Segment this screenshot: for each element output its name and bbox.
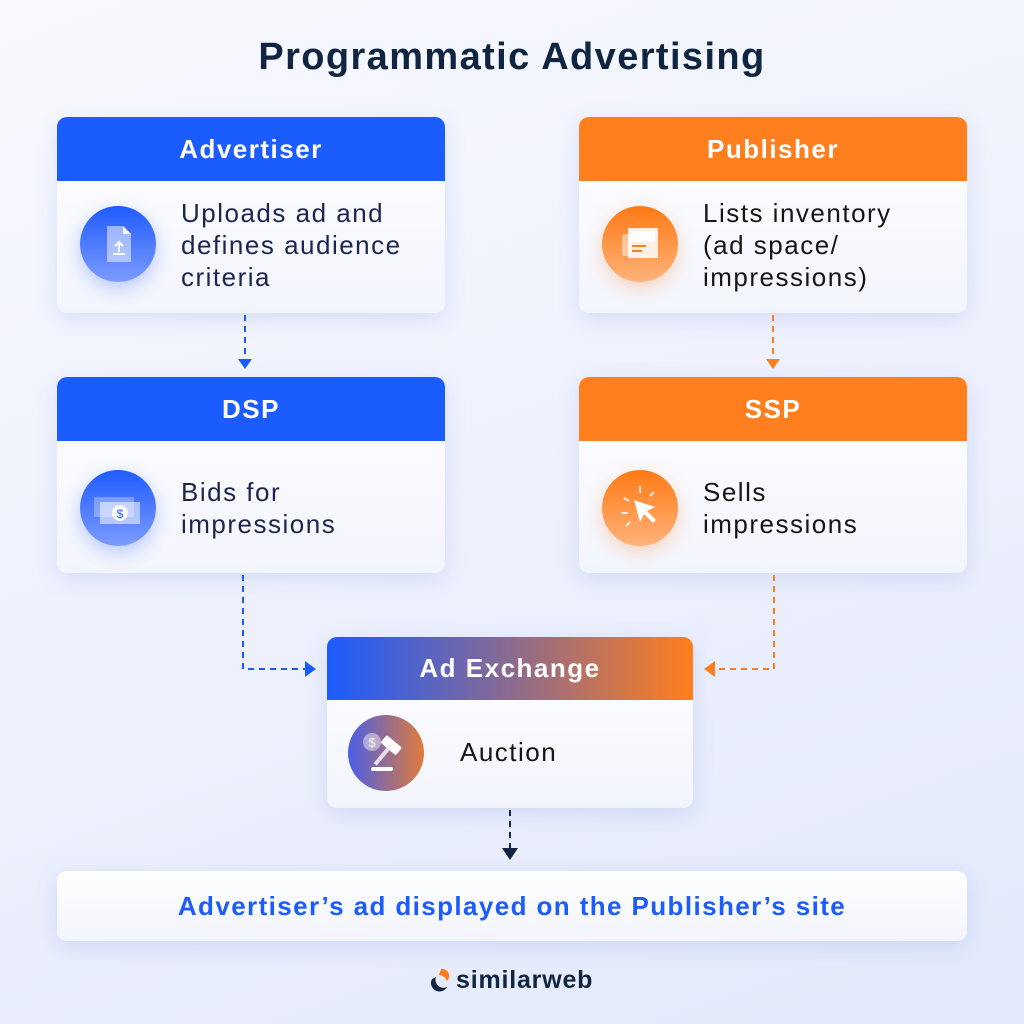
icon: money: $ <box>117 507 124 521</box>
text: DSP <box>181 477 336 539</box>
text: publisher: impressions) <box>703 262 868 292</box>
panel: DSP <box>57 377 445 573</box>
header: SSP <box>579 377 967 441</box>
logo: similarweb: similarweb <box>456 966 593 994</box>
text: auction: Auction <box>460 737 557 767</box>
header: DSP <box>57 377 445 441</box>
header: advertiser: Advertiser <box>179 134 323 164</box>
header: publisher: Publisher <box>707 134 839 164</box>
icon: cursor click <box>602 470 678 546</box>
text: advertiser: criteria <box>181 262 271 292</box>
text: advertiser: Uploads ad and <box>181 198 384 228</box>
arrow: ad exchange to result <box>502 810 518 860</box>
text: advertiser <box>181 198 402 292</box>
icon: gavel <box>348 715 424 791</box>
icon: money <box>80 470 156 546</box>
result bar <box>57 871 967 941</box>
header: ad exchange: Ad Exchange <box>419 653 601 683</box>
panel: SSP <box>579 377 967 573</box>
text: DSP: impressions <box>181 509 336 539</box>
header: ad exchange <box>327 637 693 700</box>
arrow: publisher to SSP <box>766 315 780 369</box>
title: Programmatic Advertising <box>258 36 766 78</box>
panel: advertiser <box>57 117 445 313</box>
panel: ad exchange <box>327 637 693 808</box>
icon: upload document <box>80 206 156 282</box>
panel: publisher <box>579 117 967 313</box>
icon: similarweb mark <box>431 968 450 992</box>
arrow: SSP to ad exchange <box>704 575 775 677</box>
icon: newspaper <box>602 206 678 282</box>
header: SSP: SSP <box>745 394 801 424</box>
header: publisher <box>579 117 967 181</box>
text: SSP: impressions <box>703 509 858 539</box>
header: advertiser <box>57 117 445 181</box>
text: DSP: Bids for <box>181 477 281 507</box>
text: publisher: (ad space/ <box>703 230 839 260</box>
arrow: DSP to ad exchange <box>242 575 316 677</box>
arrow: advertiser to DSP <box>238 315 252 369</box>
text: advertiser: defines audience <box>181 230 402 260</box>
text: publisher: Lists inventory <box>703 198 892 228</box>
icon: gavel: $ <box>368 735 376 750</box>
result bar: Advertiser’s ad displayed on the Publisher’s site <box>178 890 846 920</box>
text: publisher <box>703 198 892 292</box>
text: SSP: Sells <box>703 477 767 507</box>
header: DSP: DSP <box>222 394 280 424</box>
text: SSP <box>703 477 858 539</box>
